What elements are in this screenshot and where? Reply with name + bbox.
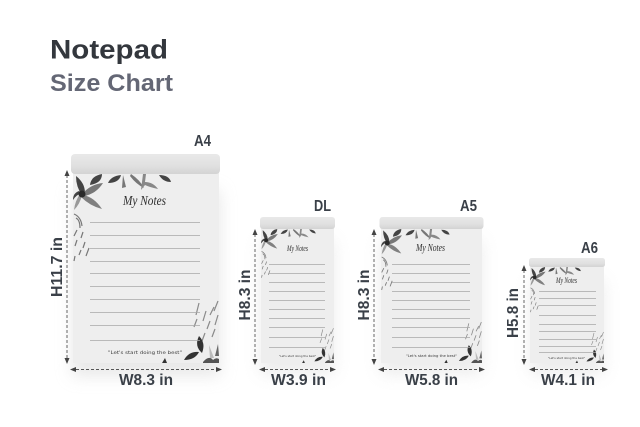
my notes heading: My Notes	[555, 276, 577, 285]
floral bottom decoration	[302, 328, 334, 363]
height arrow	[372, 229, 376, 365]
height arrow	[252, 229, 258, 365]
binding	[529, 258, 605, 267]
my notes heading: My Notes	[415, 243, 445, 254]
tagline: "Let's start doing the best"	[279, 354, 317, 358]
floral top decoration	[530, 267, 581, 312]
notepad A4	[49, 133, 222, 389]
label: W3.9 in: W3.9 in	[271, 372, 326, 389]
label: DL: DL	[314, 198, 331, 215]
heading: Notepad: Notepad	[50, 34, 168, 64]
pad shadow	[530, 280, 604, 374]
label: W8.3 in: W8.3 in	[119, 372, 173, 389]
width arrow	[259, 367, 336, 372]
binding	[71, 154, 220, 174]
floral bottom decoration	[444, 322, 482, 363]
notepad DL	[237, 198, 336, 389]
height arrow	[64, 170, 70, 364]
ruled lines	[269, 264, 325, 348]
floral top decoration	[381, 229, 450, 290]
ruled lines	[539, 292, 596, 352]
label: A6: A6	[581, 240, 598, 257]
height arrow	[522, 265, 526, 365]
sheet	[73, 170, 219, 363]
ruled lines	[392, 264, 470, 348]
binding	[380, 217, 484, 229]
notepad A5	[356, 198, 485, 389]
sheet	[381, 225, 482, 363]
tagline: "Let's start doing the best"	[406, 354, 457, 358]
title	[50, 34, 173, 97]
tagline: "Let's start doing the best"	[108, 350, 182, 356]
label: A4: A4	[194, 133, 211, 150]
floral bottom decoration	[576, 332, 604, 363]
floral top decoration	[73, 174, 171, 261]
my notes heading: My Notes	[286, 244, 308, 253]
label: A5: A5	[460, 198, 477, 215]
sheet	[530, 264, 604, 363]
sheet	[261, 225, 334, 363]
binding	[260, 217, 335, 229]
label: W5.8 in: W5.8 in	[405, 372, 458, 389]
label: W4.1 in: W4.1 in	[541, 372, 595, 389]
width arrow	[70, 367, 222, 372]
floral bottom decoration	[162, 301, 219, 363]
floral top decoration	[261, 229, 316, 278]
tagline: "Let's start doing the best"	[548, 356, 586, 360]
notepad A6	[505, 240, 608, 389]
pad shadow	[380, 240, 482, 374]
pad shadow	[72, 190, 220, 376]
ruled lines	[90, 222, 200, 340]
width arrow	[529, 367, 608, 372]
label: H8.3 in: H8.3 in	[237, 270, 254, 320]
label: H8.3 in: H8.3 in	[356, 270, 373, 320]
my notes heading: My Notes	[122, 194, 166, 209]
label: H5.8 in: H5.8 in	[505, 288, 522, 338]
width arrow	[378, 367, 485, 372]
subheading: Size Chart: Size Chart	[50, 70, 173, 97]
label: H11.7 in: H11.7 in	[49, 237, 66, 297]
pad shadow	[260, 240, 334, 374]
